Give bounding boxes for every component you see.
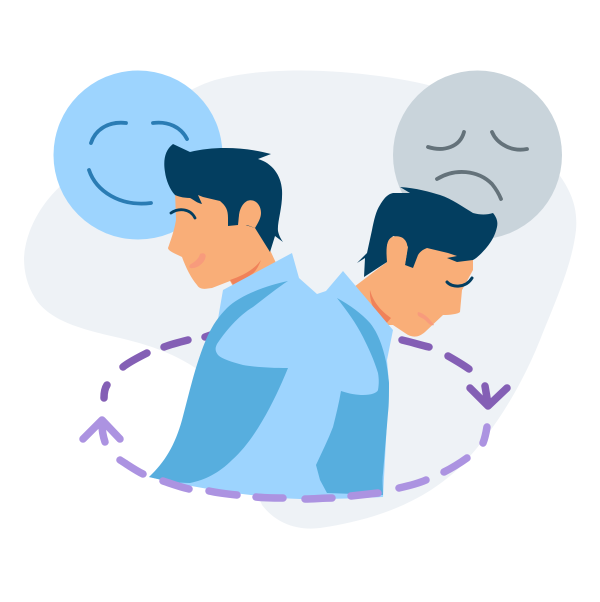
cycle arrow: purple light half xyxy=(83,420,487,499)
right frown cheek xyxy=(418,312,434,325)
left eye xyxy=(171,210,195,218)
left hair xyxy=(164,144,283,252)
right hair xyxy=(357,187,497,277)
right eye xyxy=(447,278,472,286)
arrow head down xyxy=(470,386,507,406)
sad man xyxy=(350,187,497,337)
dashes bottom xyxy=(120,460,143,474)
cycle arrow: purple dark half xyxy=(104,340,507,406)
right neck shadow xyxy=(370,290,391,325)
shirt dark sleeve right xyxy=(316,298,389,495)
sad eyes and frown xyxy=(428,132,527,199)
shirt xyxy=(149,253,393,499)
happy eyes and smile xyxy=(89,123,187,204)
right ear xyxy=(387,236,407,265)
shirt dark sleeve left xyxy=(149,281,288,483)
dashes upper right xyxy=(402,340,429,347)
left smile cheek xyxy=(189,253,206,268)
happy emoji xyxy=(54,70,222,240)
dashes upper left xyxy=(164,340,188,347)
left neck shadow xyxy=(230,260,261,286)
happy man xyxy=(164,144,283,289)
right face xyxy=(350,230,473,337)
dash stub behind shirt xyxy=(205,331,222,337)
sad emoji xyxy=(393,70,562,240)
happy face circle xyxy=(54,70,222,240)
shirt light base with collars xyxy=(149,253,393,499)
background blob xyxy=(24,70,576,529)
left face xyxy=(168,180,276,289)
arrow head up xyxy=(83,420,120,442)
sad face circle xyxy=(393,70,562,240)
left ear xyxy=(238,200,261,228)
